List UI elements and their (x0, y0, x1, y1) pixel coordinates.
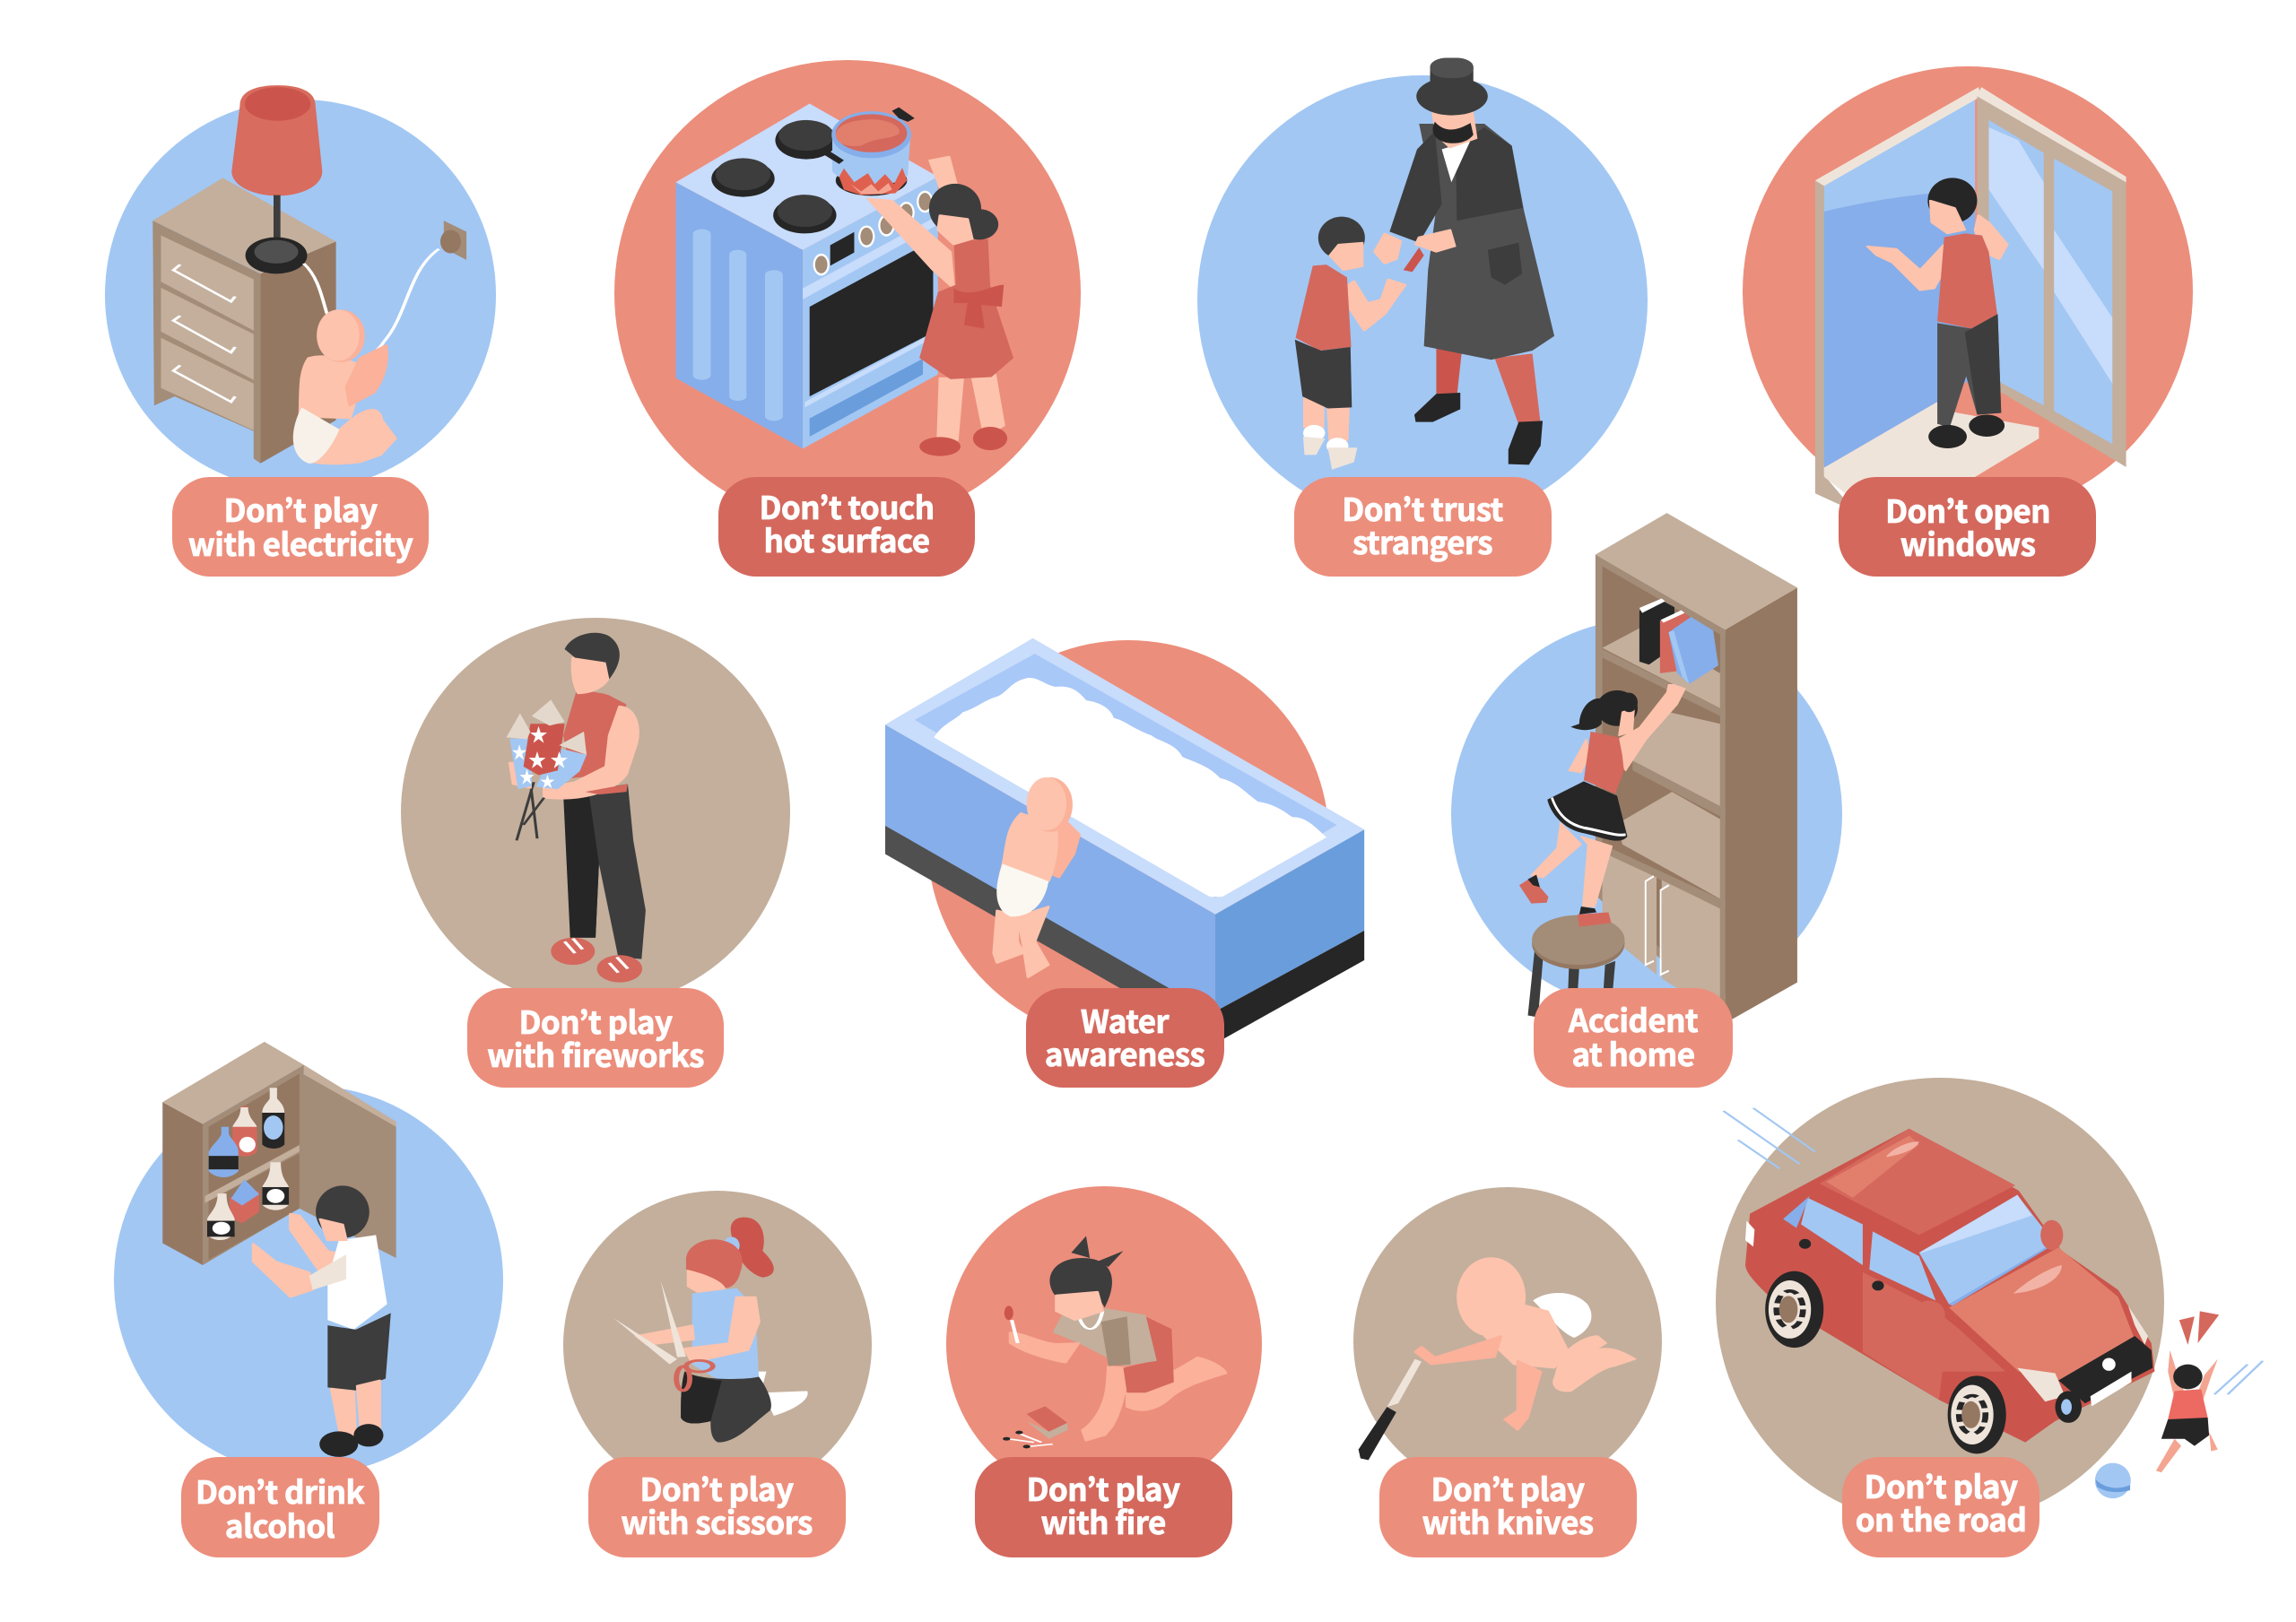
label: awareness (1045, 1030, 1205, 1076)
background circle (927, 640, 1329, 1042)
label: hot surface (764, 516, 929, 562)
background circle (563, 1191, 872, 1499)
label: with knives (1422, 1498, 1594, 1544)
label: with fireworks (487, 1031, 704, 1077)
background circle (946, 1186, 1262, 1502)
panel: don't play on the road (1716, 1078, 2263, 1557)
illustration: girl with matches (1003, 1236, 1226, 1448)
background circle (1743, 66, 2193, 516)
label: at home (1572, 1030, 1694, 1076)
label (588, 1457, 846, 1557)
illustration: girl climbing bookcase (1519, 513, 1797, 1023)
panel: don't drink alcohol (114, 1042, 503, 1557)
label: Don’t play (1027, 1465, 1180, 1511)
illustration: girl holding scissors (614, 1218, 808, 1443)
label (1842, 1457, 2039, 1557)
background circle (401, 618, 790, 1007)
label: Don’t play (1865, 1462, 2018, 1508)
illustration: stranger offering candy to boy (1295, 57, 1554, 470)
label: Accident (1568, 996, 1699, 1042)
illustration: boy at open window (1815, 87, 2126, 512)
panel: don't play with fireworks (401, 618, 790, 1088)
background circle (1451, 619, 1842, 1010)
panel: don't open windows (1743, 66, 2193, 577)
label: with fire (1040, 1498, 1166, 1544)
label (975, 1457, 1232, 1557)
background circle (1197, 75, 1648, 525)
illustration: boy at alcohol cabinet (162, 1042, 396, 1457)
illustration: stove and girl (675, 104, 1013, 456)
label (1839, 477, 2096, 577)
background circle (1353, 1187, 1662, 1496)
panel: accident at home (1451, 513, 1842, 1088)
label (467, 988, 724, 1088)
panel: don't play with knives (1353, 1187, 1662, 1557)
illustration: baby at bathtub (885, 638, 1364, 1044)
label (1534, 988, 1733, 1088)
label: Don’t open (1885, 487, 2050, 533)
label (1379, 1457, 1637, 1557)
label: Don’t play (1431, 1465, 1585, 1511)
label (1294, 477, 1552, 577)
illustration: baby, dresser, lamp and socket (152, 85, 466, 464)
label (718, 477, 975, 577)
label (172, 477, 429, 577)
label (181, 1457, 379, 1557)
label: Don’t play (519, 998, 673, 1044)
background circle (114, 1086, 503, 1475)
label: alcohol (225, 1502, 335, 1548)
label: Don’t play (640, 1465, 794, 1511)
label: Water (1081, 997, 1170, 1043)
label: with scissors (621, 1498, 813, 1544)
label: on the road (1856, 1496, 2026, 1541)
label: Don’t drink (196, 1468, 364, 1514)
background circle (1716, 1078, 2164, 1526)
panel: don't trust strangers (1197, 57, 1648, 577)
label: Don’t touch (759, 483, 935, 529)
label: Don’t play (224, 486, 378, 532)
illustration: car, child and ball (1724, 1108, 2263, 1498)
panel: water awareness (885, 638, 1364, 1088)
background circle (614, 60, 1081, 526)
panel: don't play with fire (946, 1186, 1262, 1557)
label: windows (1900, 520, 2036, 566)
label (1026, 988, 1224, 1088)
background circle (105, 100, 496, 490)
panel: don't touch hot surface (614, 60, 1081, 577)
label: with electricity (188, 520, 413, 566)
illustration: man holding fireworks (507, 633, 646, 983)
panel: don't play with electricity (105, 85, 496, 577)
illustration: crawling baby and knife (1359, 1258, 1635, 1460)
label: strangers (1352, 518, 1492, 564)
label: Don’t trust (1342, 485, 1504, 531)
panel: don't play with scissors (563, 1191, 872, 1557)
